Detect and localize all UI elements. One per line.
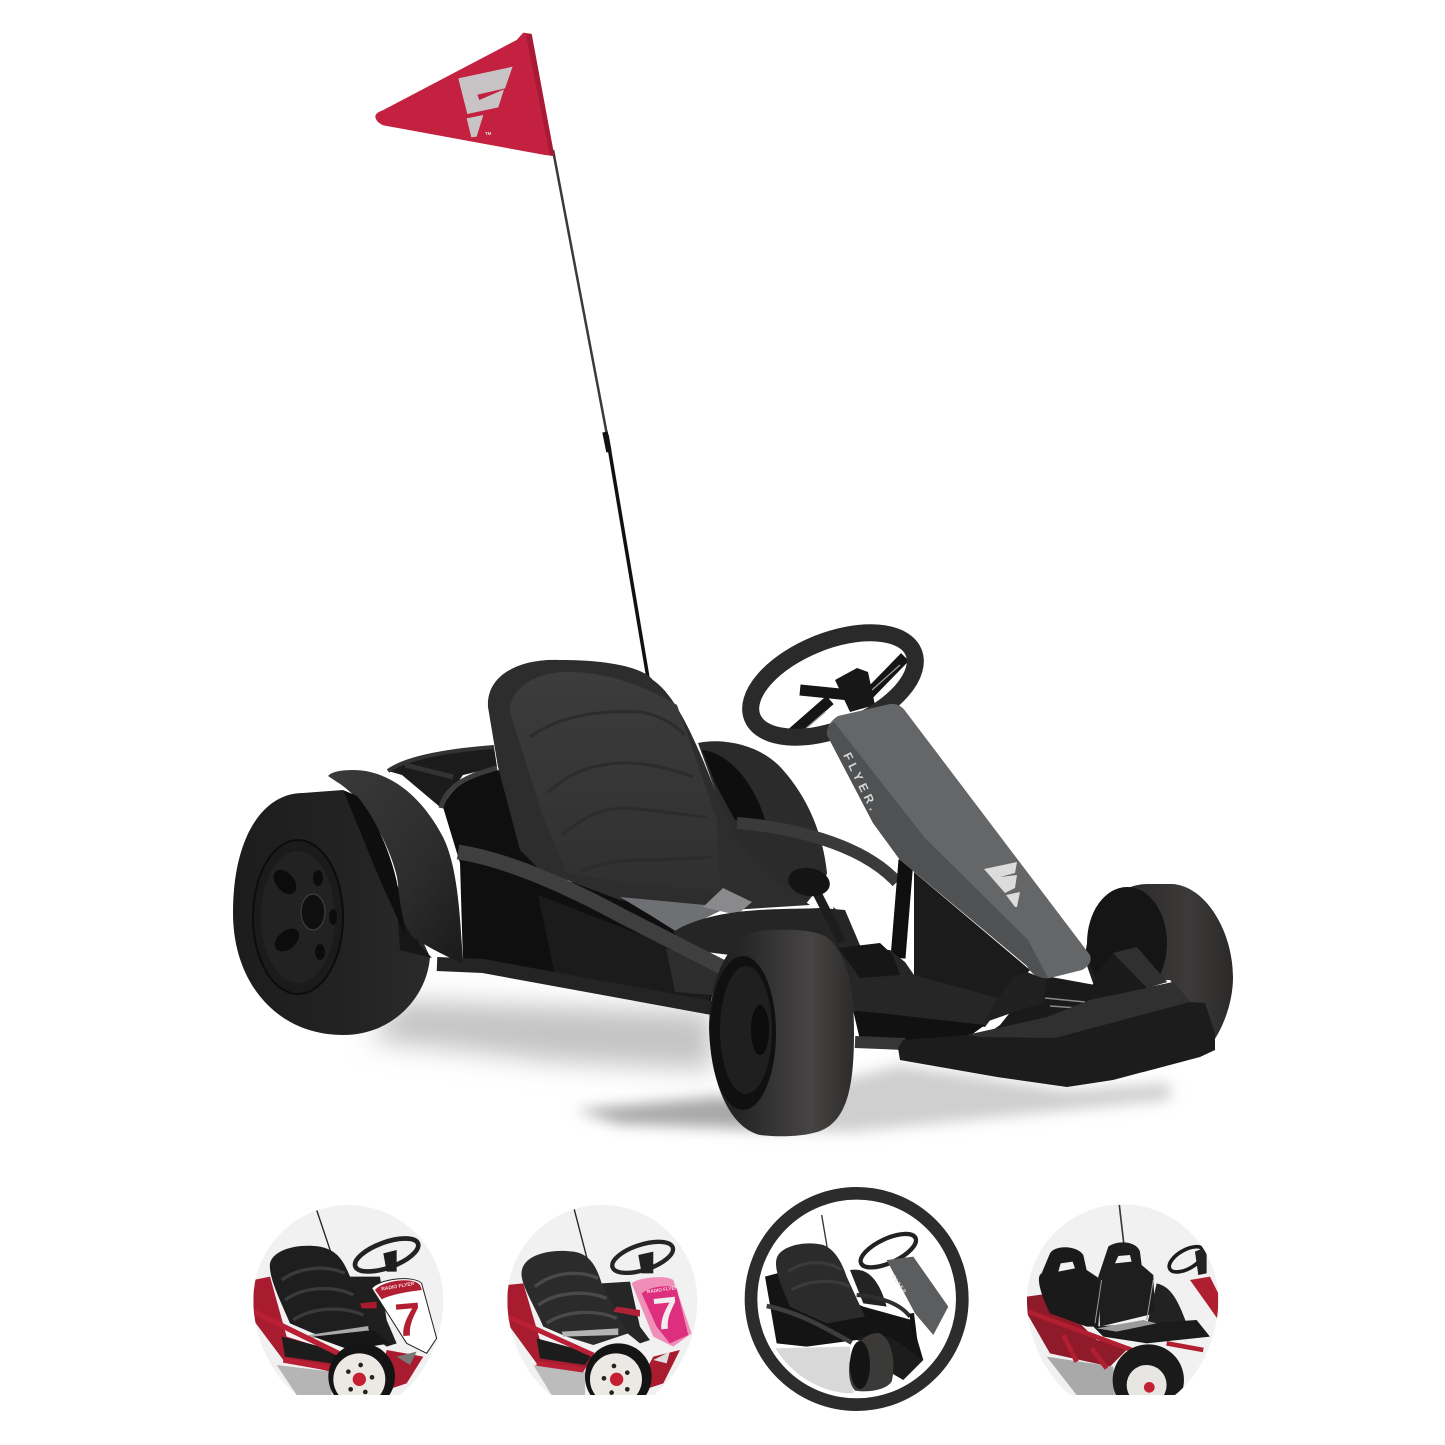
foot pedal (838, 943, 900, 978)
thumbnail: red two-seat kart (1027, 1204, 1218, 1416)
foot plate (853, 1010, 985, 1044)
rear fender (328, 770, 463, 963)
panel logo F (984, 862, 1020, 907)
front axle (855, 1042, 905, 1044)
nose bumper (898, 947, 1215, 1087)
steering column (898, 860, 906, 958)
cowl block under panel (914, 872, 1030, 1003)
thumbnail: red kart with pink number 7 (507, 1205, 697, 1410)
main frame tube (458, 852, 722, 967)
rear frame arc (441, 768, 497, 808)
rear deck (388, 747, 497, 807)
thumbnail: red kart with white number 7 (253, 1205, 443, 1410)
flag logo F: TM (485, 131, 492, 136)
thumbnail: red kart with pink number 7: RADIO FLYER (647, 1285, 679, 1294)
seat (488, 660, 810, 912)
rear wheel (233, 790, 430, 1035)
main product photo: go-kart with flag (233, 33, 1233, 1136)
far rear wheel and fender (698, 741, 827, 905)
thumbnail: black kart, selected with ring (751, 1193, 962, 1405)
linkage behind panel (990, 975, 1095, 1032)
ground shadows (370, 1000, 1170, 1132)
side box (538, 895, 720, 1003)
near front wheel (709, 930, 854, 1136)
seat belt (620, 888, 752, 932)
panel FLYER wordmark: FLYER. (840, 750, 882, 816)
thumbnail: red kart with white number 7: RADIO FLYER (381, 1281, 415, 1293)
red pennant flag with logo (375, 33, 554, 156)
thumbnail: red kart with white number 7: 7 (393, 1293, 423, 1347)
front wheel far side (1085, 884, 1233, 1042)
seat cushion ridges (530, 712, 713, 872)
chassis body (443, 770, 720, 1005)
shift lever (786, 865, 860, 952)
arc side tube (737, 823, 897, 882)
seat pan (673, 908, 862, 955)
spring pedal block (983, 972, 1047, 1023)
thumbnail: black kart, selected with ring: FLYER (891, 1274, 908, 1295)
steering wheel (736, 612, 930, 758)
grey steering panel (827, 704, 1091, 978)
thumbnails row (253, 1193, 1218, 1416)
thumbnail: red kart with pink number 7: 7 (651, 1287, 681, 1340)
flag logo F (458, 67, 513, 137)
lower chassis rail (437, 964, 712, 1008)
flag pole (553, 150, 648, 678)
floor body (838, 948, 1005, 1027)
